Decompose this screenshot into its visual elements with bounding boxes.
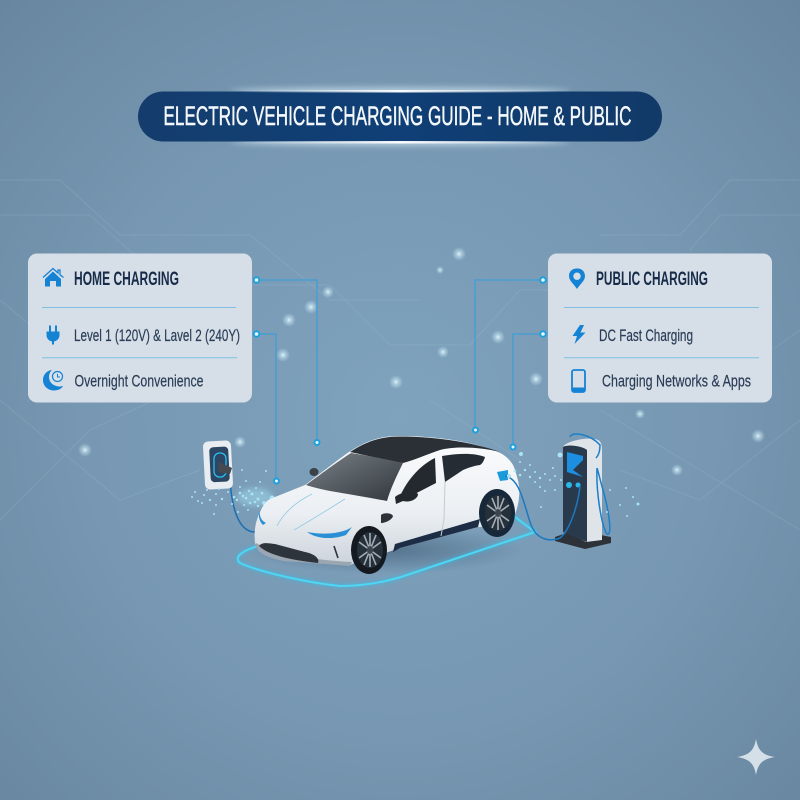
- particle glow: [237, 488, 273, 506]
- panel dividers: [42, 308, 237, 358]
- car to station cable: [505, 476, 580, 540]
- text: charging levels: Level 1 (120V) & Lavel 2 (240Y): [74, 327, 240, 345]
- front grille: [259, 543, 318, 563]
- plate face: [209, 446, 230, 482]
- side window front: [398, 458, 436, 501]
- car body: [255, 436, 519, 565]
- icon: smartphone: [572, 370, 585, 392]
- panel background: [28, 254, 252, 402]
- station base: [555, 530, 611, 549]
- banner highlights: [240, 90, 560, 144]
- title banner: [138, 87, 662, 146]
- public charging station: [505, 434, 611, 549]
- plug ring: [214, 453, 226, 477]
- headlight right: [307, 527, 352, 538]
- station front face: [563, 446, 587, 542]
- front fender vent: [381, 513, 393, 523]
- headlight left: [259, 510, 266, 525]
- energy particles: right: [507, 452, 640, 517]
- banner pill: [138, 92, 662, 142]
- far mirror: [310, 468, 318, 476]
- panel background: [548, 254, 772, 402]
- front wheel: [351, 526, 387, 574]
- station screen: [567, 452, 583, 477]
- screen highlight: [573, 460, 583, 477]
- panel dividers: [564, 308, 759, 358]
- wall charger: [203, 440, 255, 532]
- rear wheel: [479, 489, 515, 537]
- icon: plug: [46, 326, 60, 344]
- station buttons: [566, 482, 580, 488]
- heading: home charging: HOME CHARGING: [74, 268, 179, 290]
- charge port: [497, 470, 508, 481]
- banner light flares: [230, 87, 570, 146]
- energy particles: left: [191, 469, 274, 515]
- plug: [218, 462, 232, 474]
- roof: [350, 436, 500, 463]
- connector nodes: [254, 277, 546, 484]
- lower body shade: [255, 543, 352, 566]
- panel: public charging: [548, 254, 772, 402]
- text: dc fast charging: DC Fast Charging: [599, 327, 693, 345]
- station tower: [563, 439, 602, 542]
- side vent: [334, 546, 338, 558]
- connector lines: [256, 280, 543, 481]
- charger cable: [230, 478, 255, 532]
- side window rear: [442, 454, 485, 482]
- car shadow: [245, 526, 525, 574]
- circuit line pattern: [0, 180, 800, 530]
- ambient glow dots: [78, 247, 765, 476]
- particle dots: [191, 469, 274, 515]
- mirror: [395, 492, 418, 504]
- heading: public charging: PUBLIC CHARGING: [596, 268, 708, 290]
- icon: moon and clock: [43, 370, 63, 390]
- sill: [393, 519, 480, 552]
- icon: sparkle watermark: [737, 739, 775, 775]
- icon: house: [43, 268, 64, 286]
- icon: location pin: [569, 268, 585, 289]
- text: charging networks and apps: Charging Networks & Apps: [602, 372, 751, 390]
- parking outline glow: [238, 517, 535, 586]
- hood lines: [277, 494, 345, 530]
- wall plate: [203, 440, 233, 490]
- station hose: [570, 434, 610, 534]
- door line: [441, 482, 445, 536]
- car: [255, 436, 519, 574]
- windshield: [306, 453, 403, 501]
- panel: home charging: [28, 254, 252, 402]
- icon: lightning bolt: [572, 325, 586, 344]
- text: overnight convenience: Overnight Convenience: [74, 372, 204, 390]
